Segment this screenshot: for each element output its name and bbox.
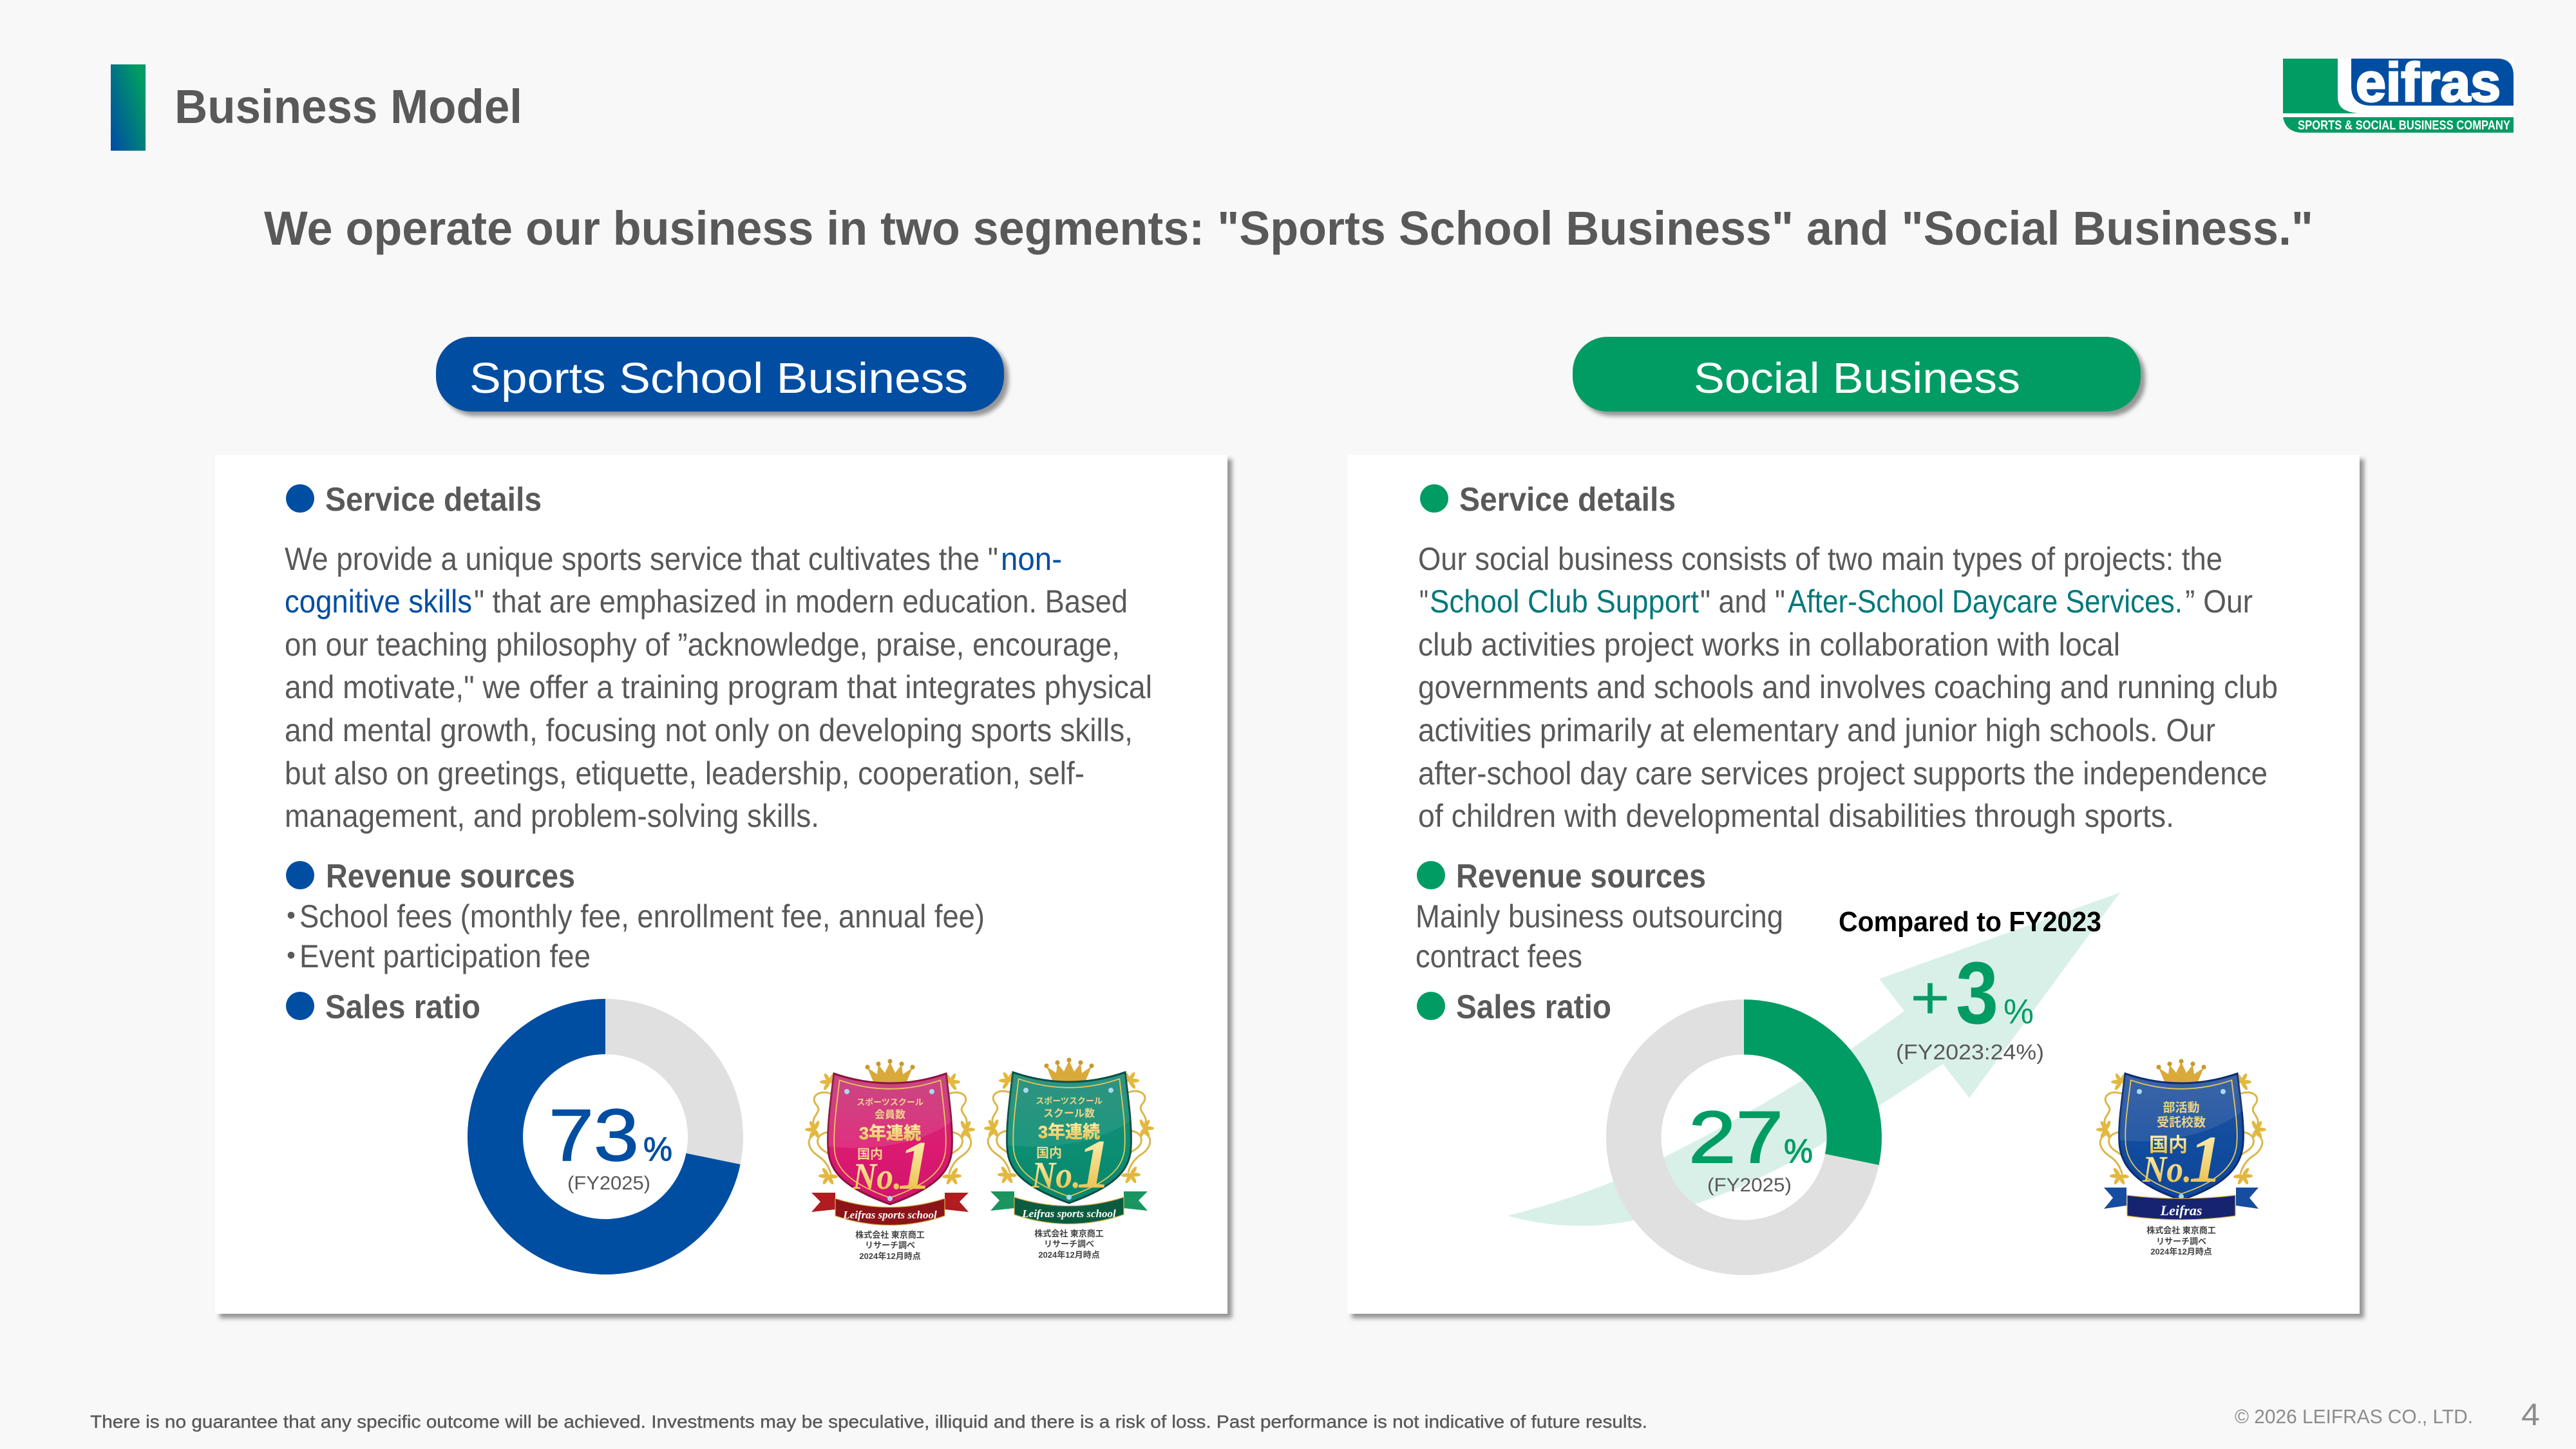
- text block: service description: club activities project works in collaboration with local: [1418, 627, 2120, 663]
- donut chart: 27%: 27: [1689, 1097, 1783, 1179]
- callout: compared to FY2023: [1839, 906, 2101, 1064]
- badge: schools No.1: 国内: [1036, 1146, 1062, 1160]
- text block: service description: management, and problem-solving skills.: [285, 798, 819, 834]
- pill: Sports School Business: Sports School Business: [469, 354, 968, 402]
- badge: schools No.1: 3年連続: [1038, 1122, 1100, 1142]
- badge: schools No.1: スポーツスクール: [1036, 1096, 1103, 1106]
- callout: compared to FY2023: %: [2003, 992, 2034, 1031]
- arrow: growth: [1508, 893, 2120, 1226]
- callout: compared to FY2023: (FY2023:24%): [1896, 1040, 2044, 1064]
- text block: revenue description: Mainly business outsourcing: [1416, 898, 1783, 934]
- badge: members No.1: 2024年12月時点: [859, 1251, 921, 1261]
- badge: club activities No.1: 部活動: [2163, 1101, 2200, 1115]
- badge: schools No.1: リサーチ調べ: [1044, 1239, 1094, 1249]
- badge: club activities No.1: 株式会社 東京商工: [2146, 1226, 2216, 1235]
- text block: service description: We provide a unique sports service that cultivates the ": [285, 541, 998, 577]
- copyright: © 2026 LEIFRAS CO., LTD.: [2235, 1405, 2473, 1428]
- badge: club activities No.1: [2096, 1059, 2266, 1256]
- badge: club activities No.1: 受託校数: [2157, 1115, 2206, 1130]
- text block: service description: on our teaching philosophy of ”acknowledge, praise, encourage,: [285, 627, 1120, 663]
- text block: service description: School Club Support: [1430, 583, 1699, 620]
- panel: Sports School Business: [215, 455, 1227, 1314]
- badge: club activities No.1: 国内: [2149, 1135, 2188, 1156]
- page number: 4: [2521, 1398, 2540, 1432]
- donut chart: 27%: (FY2025): [1707, 1175, 1792, 1196]
- text block: service description: governments and schools and involves coaching and running club: [1418, 669, 2278, 705]
- text block: service description: non-: [1001, 541, 1062, 577]
- badge: club activities No.1: No.: [2142, 1148, 2192, 1190]
- badge: schools No.1: 2024年12月時点: [1038, 1250, 1100, 1260]
- badge: schools No.1: No.: [1031, 1154, 1081, 1196]
- text block: revenue list: ・: [275, 898, 307, 934]
- badge: members No.1: スポーツスクール: [857, 1097, 923, 1107]
- badge: schools No.1: 1: [1077, 1126, 1112, 1203]
- callout: compared to FY2023: Compared to FY2023: [1839, 906, 2101, 938]
- text block: service description: and mental growth, focusing not only on developing sports skills,: [285, 712, 1133, 748]
- badge: schools No.1: スクール数: [1043, 1108, 1095, 1119]
- text block: revenue description: [1416, 898, 1783, 974]
- text block: service description: ” Our: [2185, 583, 2253, 620]
- text block: revenue list: [275, 898, 985, 974]
- bullet: revenue sources: [1417, 861, 1445, 889]
- badge: members No.1: 株式会社 東京商工: [855, 1230, 925, 1240]
- donut chart: 73%: [468, 999, 743, 1274]
- page title: Business Model: [175, 80, 522, 133]
- text block: revenue description: contract fees: [1416, 938, 1582, 974]
- heading: sales ratio: Sales ratio: [1456, 989, 1611, 1026]
- text block: service description: " and ": [1700, 583, 1785, 620]
- text block: service description: but also on greetings, etiquette, leadership, cooperation, self-: [285, 755, 1084, 791]
- badge: members No.1: 3年連続: [859, 1124, 921, 1143]
- text block: service description: [1418, 541, 2278, 834]
- logo: Leifras: eifras: [2356, 52, 2501, 113]
- donut chart: 27%: [1606, 999, 1882, 1275]
- badge: members No.1: [805, 1059, 975, 1261]
- bullet: sales ratio: [1417, 992, 1445, 1020]
- callout: compared to FY2023: 3: [1956, 944, 1998, 1043]
- badge: schools No.1: 株式会社 東京商工: [1034, 1229, 1104, 1238]
- badge: club activities No.1: Leifras: [2160, 1202, 2202, 1218]
- footer disclaimer: There is no guarantee that any specific outcome will be achieved. Investments may be speculative, illiquid and there is a risk of loss. Past performance is not indicative of future results.: [90, 1412, 1647, 1432]
- donut chart: 27%: %: [1784, 1133, 1813, 1170]
- text block: service description: Our social business consists of two main types of projects: the: [1418, 541, 2222, 577]
- badge: members No.1: 国内: [857, 1147, 883, 1162]
- heading: sales ratio: Sales ratio: [325, 989, 480, 1026]
- donut chart: 73%: 73: [549, 1095, 639, 1177]
- heading: revenue sources: Revenue sources: [1456, 858, 1706, 895]
- badge: schools No.1: Leifras sports school: [1021, 1208, 1116, 1220]
- badge: members No.1: リサーチ調べ: [865, 1240, 915, 1250]
- text block: service description: activities primarily at elementary and junior high schools. Our: [1418, 712, 2215, 748]
- badge: members No.1: 会員数: [875, 1109, 905, 1121]
- badge: members No.1: No.: [852, 1155, 902, 1197]
- text block: service description: After-School Daycare Services.: [1788, 583, 2183, 620]
- badge: club activities No.1: 2024年12月時点: [2150, 1247, 2212, 1256]
- bullet: service details: [286, 484, 314, 513]
- badge: members No.1: Leifras sports school: [842, 1209, 937, 1221]
- callout: compared to FY2023: +: [1910, 963, 1950, 1032]
- panel: Social Business: [1347, 455, 2360, 1314]
- text block: service description: " that are emphasized in modern education. Based: [474, 583, 1128, 620]
- text block: service description: and motivate," we offer a training program that integrates physical: [285, 669, 1152, 705]
- logo: Leifras: SPORTS & SOCIAL BUSINESS COMPANY: [2298, 118, 2511, 133]
- text block: revenue list: Event participation fee: [299, 938, 591, 974]
- text block: service description: cognitive skills: [285, 583, 472, 620]
- heading: service details: Service details: [325, 481, 542, 518]
- text block: service description: ": [1419, 583, 1428, 620]
- heading: revenue sources: Revenue sources: [326, 858, 575, 895]
- pill: Sports School Business: [436, 337, 1004, 412]
- text block: revenue list: ・: [275, 938, 307, 974]
- title accent bar: [111, 64, 146, 151]
- badge: schools No.1: [984, 1057, 1154, 1260]
- bullet: revenue sources: [286, 861, 314, 889]
- text block: service description: after-school day care services project supports the independence: [1418, 755, 2268, 791]
- pill: Social Business: [1573, 337, 2141, 412]
- badge: members No.1: 1: [898, 1128, 933, 1204]
- pill: Social Business: Social Business: [1694, 354, 2020, 402]
- main heading: We operate our business in two segments: "Sports School Business" and "Social Business.": [264, 202, 2313, 255]
- badge: club activities No.1: リサーチ調べ: [2156, 1236, 2206, 1246]
- logo: Leifras: [2283, 52, 2514, 133]
- donut chart: 73%: %: [643, 1131, 672, 1168]
- text block: service description: of children with developmental disabilities through sports.: [1418, 798, 2174, 834]
- text block: service description: [285, 541, 1152, 834]
- heading: service details: Service details: [1459, 481, 1676, 518]
- badge: club activities No.1: 1: [2189, 1122, 2222, 1197]
- bullet: service details: [1420, 484, 1448, 513]
- text block: revenue list: School fees (monthly fee, enrollment fee, annual fee): [299, 898, 985, 934]
- bullet: sales ratio: [286, 992, 314, 1020]
- donut chart: 73%: (FY2025): [567, 1173, 650, 1194]
